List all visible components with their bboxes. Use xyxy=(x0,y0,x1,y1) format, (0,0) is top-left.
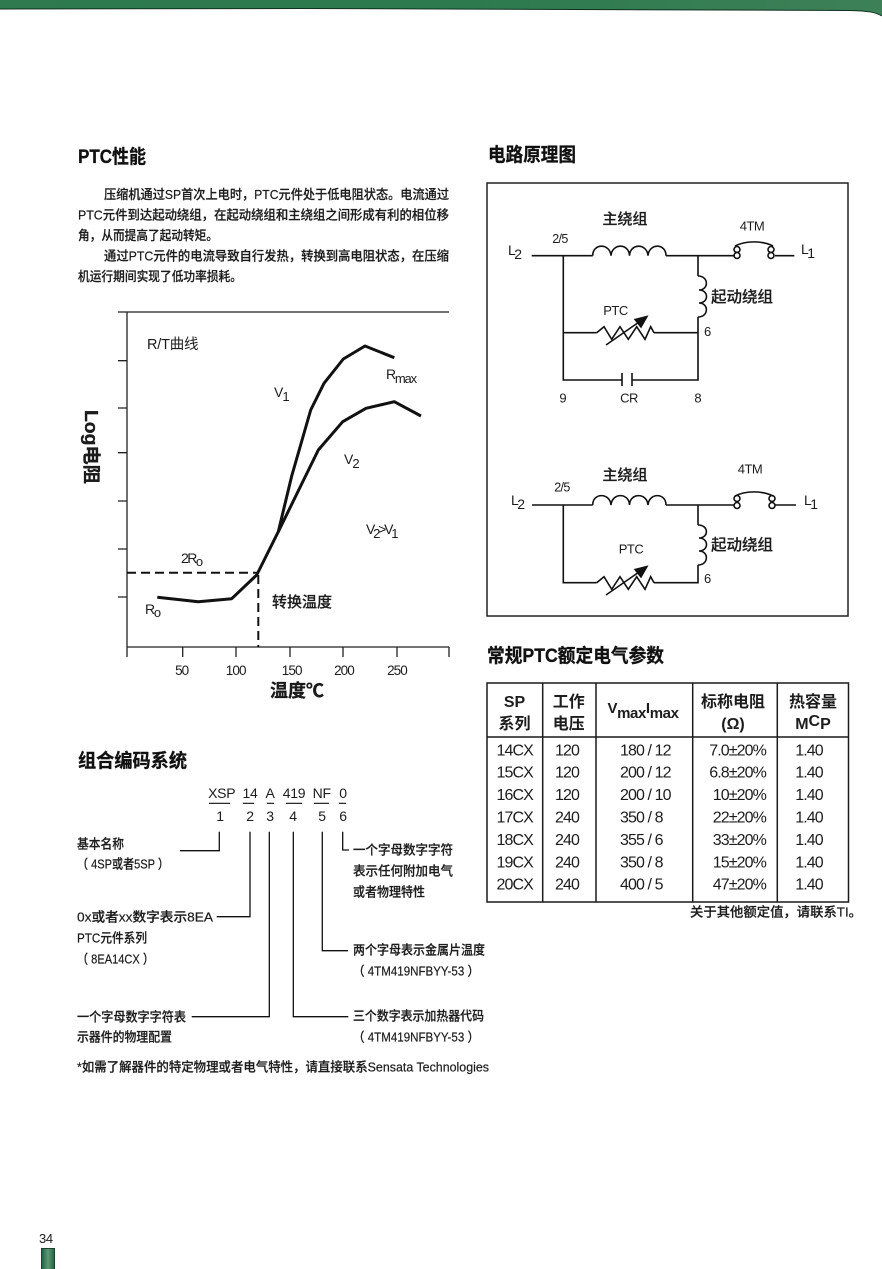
note: extra features: 表示任何附加电气 xyxy=(353,864,453,878)
label V2>V1: V xyxy=(366,521,373,537)
circuit 2 thermal protector xyxy=(735,492,773,496)
column: heat capacity: 1.40 xyxy=(795,854,824,872)
column: heat capacity: 1.40 xyxy=(795,832,824,849)
column: Vmax/Imax: 200 / 12 xyxy=(620,764,672,782)
circuit 1 wiring xyxy=(532,256,794,386)
column: Vmax/Imax: 350 / 8 xyxy=(620,854,664,872)
label Rmax: R xyxy=(386,366,395,382)
code letters: A xyxy=(265,785,275,801)
circuit 2 start winding coil xyxy=(698,525,706,565)
text block: PTC description: 压缩机通过SP首次上电时，PTC元件处于低电阻状态。电流通过 xyxy=(104,187,449,202)
circuit 1 labels: 6 xyxy=(704,324,711,339)
code letters: 0 xyxy=(339,785,347,801)
column: Vmax/Imax: 400 / 5 xyxy=(620,876,664,894)
text block: PTC description: 机运行期间实现了低功率损耗。 xyxy=(78,269,242,284)
note: physical configuration: 示器件的物理配置 xyxy=(77,1030,172,1044)
page number: 34 xyxy=(39,1231,53,1246)
column: nominal resistance: 6.8±20% xyxy=(709,764,767,782)
circuit 2 PTC arrow xyxy=(606,566,647,595)
label 2Ro: o xyxy=(196,554,203,569)
text block: PTC description: 角，从而提高了起动转矩。 xyxy=(78,228,218,243)
table header: M xyxy=(795,716,809,733)
table header: 工作 xyxy=(553,693,585,711)
table header: SP xyxy=(504,694,526,711)
column: nominal resistance: 33±20% xyxy=(713,832,767,849)
note: blade temperature xyxy=(353,942,485,978)
note: heater code: 三个数字表示加热器代码 xyxy=(353,1008,484,1024)
coding system diagram xyxy=(77,785,485,1044)
column: series: 17CX xyxy=(496,810,534,826)
circuit 1 main winding coil xyxy=(593,246,666,256)
column: voltage: 240 xyxy=(555,832,580,849)
table header: 热容量 xyxy=(789,692,837,711)
label Ro: o xyxy=(154,605,161,620)
circuit 2 labels: 1 xyxy=(810,496,818,512)
column: heat capacity xyxy=(795,742,824,894)
chart: R/T curve xyxy=(81,312,449,701)
label V1: 1 xyxy=(282,389,289,404)
column: heat capacity: 1.40 xyxy=(795,742,824,760)
circuit 2 xyxy=(511,462,818,595)
page tab xyxy=(42,1248,54,1269)
circuit 1 labels: 9 xyxy=(559,390,567,406)
code position numbers: 2 xyxy=(246,808,254,824)
column: nominal resistance xyxy=(709,742,767,894)
column: Vmax/Imax: 350 / 8 xyxy=(620,810,664,826)
column: series: 20CX xyxy=(496,876,534,894)
column: nominal resistance: 22±20% xyxy=(713,810,767,826)
circuit 1 labels: 2/5 xyxy=(552,232,568,246)
note: extra features: 一个字母数字字符 xyxy=(353,842,453,858)
code position numbers: 5 xyxy=(318,808,326,824)
column: series: 19CX xyxy=(496,854,534,872)
circuit 1 start winding coil xyxy=(698,276,706,317)
table header: C xyxy=(809,713,821,730)
circuit 2 labels: L xyxy=(511,492,517,508)
circuit 2 labels: 起动绕组 xyxy=(711,536,773,554)
column: nominal resistance: 15±20% xyxy=(713,854,767,872)
table header: P xyxy=(820,716,831,733)
column: nominal resistance: 47±20% xyxy=(713,876,767,894)
label V1: V xyxy=(274,384,282,400)
label V2: V xyxy=(344,451,352,467)
circuit 1 xyxy=(508,211,815,406)
circuit 2 labels: PTC xyxy=(619,542,643,556)
circuit 1 PTC arrow xyxy=(606,316,647,345)
circuit 1 PTC resistor xyxy=(597,327,654,339)
circuit 2 labels xyxy=(511,462,818,586)
chart frame and ticks xyxy=(118,312,449,657)
column: voltage: 120 xyxy=(555,742,580,760)
note: heater code xyxy=(353,1008,484,1044)
column: Vmax/Imax: 180 / 12 xyxy=(620,742,672,760)
column: series: 16CX xyxy=(496,787,534,804)
note: extra features xyxy=(353,842,453,900)
table header xyxy=(498,692,837,733)
code letters: NF xyxy=(313,785,331,801)
circuit 1 labels: CR xyxy=(620,390,638,406)
curve V2 xyxy=(278,402,421,532)
code letters: 14 xyxy=(243,785,258,801)
dashed guide lines xyxy=(127,573,258,647)
code letters xyxy=(208,785,347,801)
y axis title: Log电阻 xyxy=(81,410,101,484)
column: voltage: 120 xyxy=(555,787,580,804)
curve V1 xyxy=(157,346,394,602)
circuit 1 labels: L xyxy=(801,241,807,257)
note: heater code: （ 4TM419NFBYY-53 ） xyxy=(353,1030,479,1044)
column: voltage: 120 xyxy=(555,764,580,782)
column: voltage: 240 xyxy=(555,810,580,826)
table header: 标称电阻 xyxy=(701,693,765,711)
label 2Ro: 2R xyxy=(181,550,196,566)
panel: circuit diagrams xyxy=(487,183,848,616)
code position numbers: 6 xyxy=(339,808,347,824)
x axis numbers: 200 xyxy=(334,663,354,678)
table header: 电压 xyxy=(553,715,585,733)
circuit 2 labels: 6 xyxy=(704,571,711,586)
column: series: 14CX xyxy=(496,742,534,760)
panel frame xyxy=(487,183,848,616)
note: PTC series: PTC元件系列 xyxy=(77,930,147,946)
label V2>V1: 2 xyxy=(373,526,380,541)
label Rmax: max xyxy=(395,371,418,386)
circuit 1 labels: 1 xyxy=(807,245,815,261)
table note: 关于其他额定值，请联系TI。 xyxy=(690,904,862,920)
circuit 1 labels: 8 xyxy=(694,390,702,406)
circuit 2 labels: L xyxy=(804,492,810,508)
column: heat capacity: 1.40 xyxy=(795,764,824,782)
label V2>V1: >V xyxy=(378,521,394,537)
circuit 2 wiring xyxy=(532,505,796,583)
table header: (Ω) xyxy=(721,716,745,733)
column: heat capacity: 1.40 xyxy=(795,787,824,804)
label transition temperature: 转换温度 xyxy=(272,594,332,611)
column: voltage: 240 xyxy=(555,876,580,894)
circuit 1 labels: 4TM xyxy=(740,218,764,234)
note: base name: 基本名称 xyxy=(77,836,124,852)
label Ro: R xyxy=(145,601,154,617)
table header: max xyxy=(650,705,680,722)
circuit 1 labels xyxy=(508,211,815,406)
top green band xyxy=(0,0,882,16)
circuit 1 labels: 起动绕组 xyxy=(711,288,773,306)
x axis numbers: 50 xyxy=(175,663,189,678)
column: series xyxy=(496,742,534,894)
code letters: XSP xyxy=(208,785,235,801)
note: base name xyxy=(77,836,169,872)
x axis numbers: 250 xyxy=(387,663,407,678)
column: nominal resistance: 7.0±20% xyxy=(709,742,767,760)
text block: PTC description: PTC元件到达起动绕组，在起动绕组和主绕组之间形成有利的相位移 xyxy=(78,208,449,222)
code letters: 419 xyxy=(283,785,306,801)
note: blade temperature: 两个字母表示金属片温度 xyxy=(353,942,485,958)
column: heat capacity: 1.40 xyxy=(795,876,824,894)
code position numbers: 1 xyxy=(216,808,224,824)
heading: PTC parameters: 常规PTC额定电气参数 xyxy=(487,644,664,667)
table header: V xyxy=(607,700,617,717)
circuit 2 labels: 2 xyxy=(517,496,525,512)
code position numbers xyxy=(216,808,347,824)
footnote: *如需了解器件的特定物理或者电气特性，请直接联系Sensata Technologies xyxy=(77,1060,489,1074)
table: PTC ratings xyxy=(487,683,848,902)
text block: PTC description: 通过PTC元件的电流导致自行发热，转换到高电阻状态，在压缩 xyxy=(104,248,449,264)
code underlines xyxy=(209,802,346,804)
circuit 1 labels: L xyxy=(508,242,514,258)
x axis numbers: 150 xyxy=(282,663,302,678)
heading: coding system: 组合编码系统 xyxy=(78,749,187,772)
note: physical configuration xyxy=(77,1010,186,1044)
column: series: 18CX xyxy=(496,832,534,849)
text block: PTC description xyxy=(78,187,449,284)
column: voltage: 240 xyxy=(555,854,580,872)
chart title: R/T曲线 xyxy=(147,336,198,353)
leader lines xyxy=(180,832,349,1017)
note: PTC series xyxy=(77,910,213,966)
note: PTC series: （ 8EA14CX ） xyxy=(77,952,154,966)
circuit 2 labels: 4TM xyxy=(738,462,762,476)
circuit 1 thermal protector xyxy=(735,242,773,246)
table grid xyxy=(487,683,848,902)
x axis numbers xyxy=(175,663,407,678)
heading: PTC性能: PTC性能 xyxy=(78,146,146,168)
note: base name: （ 4SP或者5SP ） xyxy=(77,856,169,872)
x axis numbers: 100 xyxy=(226,663,246,678)
note: blade temperature: （ 4TM419NFBYY-53 ） xyxy=(353,964,479,978)
label V2>V1: 1 xyxy=(391,526,398,541)
column: Vmax/Imax: 200 / 10 xyxy=(620,787,672,804)
column: Vmax/Imax: 355 / 6 xyxy=(620,832,664,849)
code position numbers: 4 xyxy=(289,808,297,824)
circuit 1 labels: 2 xyxy=(514,246,522,262)
note: physical configuration: 一个字母数字字符表 xyxy=(77,1010,186,1024)
circuit 2 main winding coil xyxy=(593,496,666,505)
note: extra features: 或者物理特性 xyxy=(353,884,425,900)
circuit 1 labels: 主绕组 xyxy=(602,211,648,228)
column: Vmax/Imax xyxy=(620,742,672,894)
circuit 2 labels: 主绕组 xyxy=(602,467,648,484)
note: PTC series: 0x或者xx数字表示8EA xyxy=(77,910,213,924)
code position numbers: 3 xyxy=(266,808,274,824)
circuit 2 labels: 2/5 xyxy=(554,480,570,494)
column: series: 15CX xyxy=(496,764,534,782)
table header: I xyxy=(646,700,650,717)
column: heat capacity: 1.40 xyxy=(795,810,824,826)
circuit 2 PTC resistor xyxy=(597,577,654,589)
circuit 1 labels: PTC xyxy=(603,303,628,318)
label V2: 2 xyxy=(352,456,359,471)
table header: max xyxy=(617,705,647,722)
heading: circuit diagram: 电路原理图 xyxy=(488,144,576,166)
column: voltage xyxy=(555,742,580,894)
x axis title: 温度℃ xyxy=(270,681,324,701)
table header: 系列 xyxy=(498,714,531,733)
column: nominal resistance: 10±20% xyxy=(713,787,767,804)
